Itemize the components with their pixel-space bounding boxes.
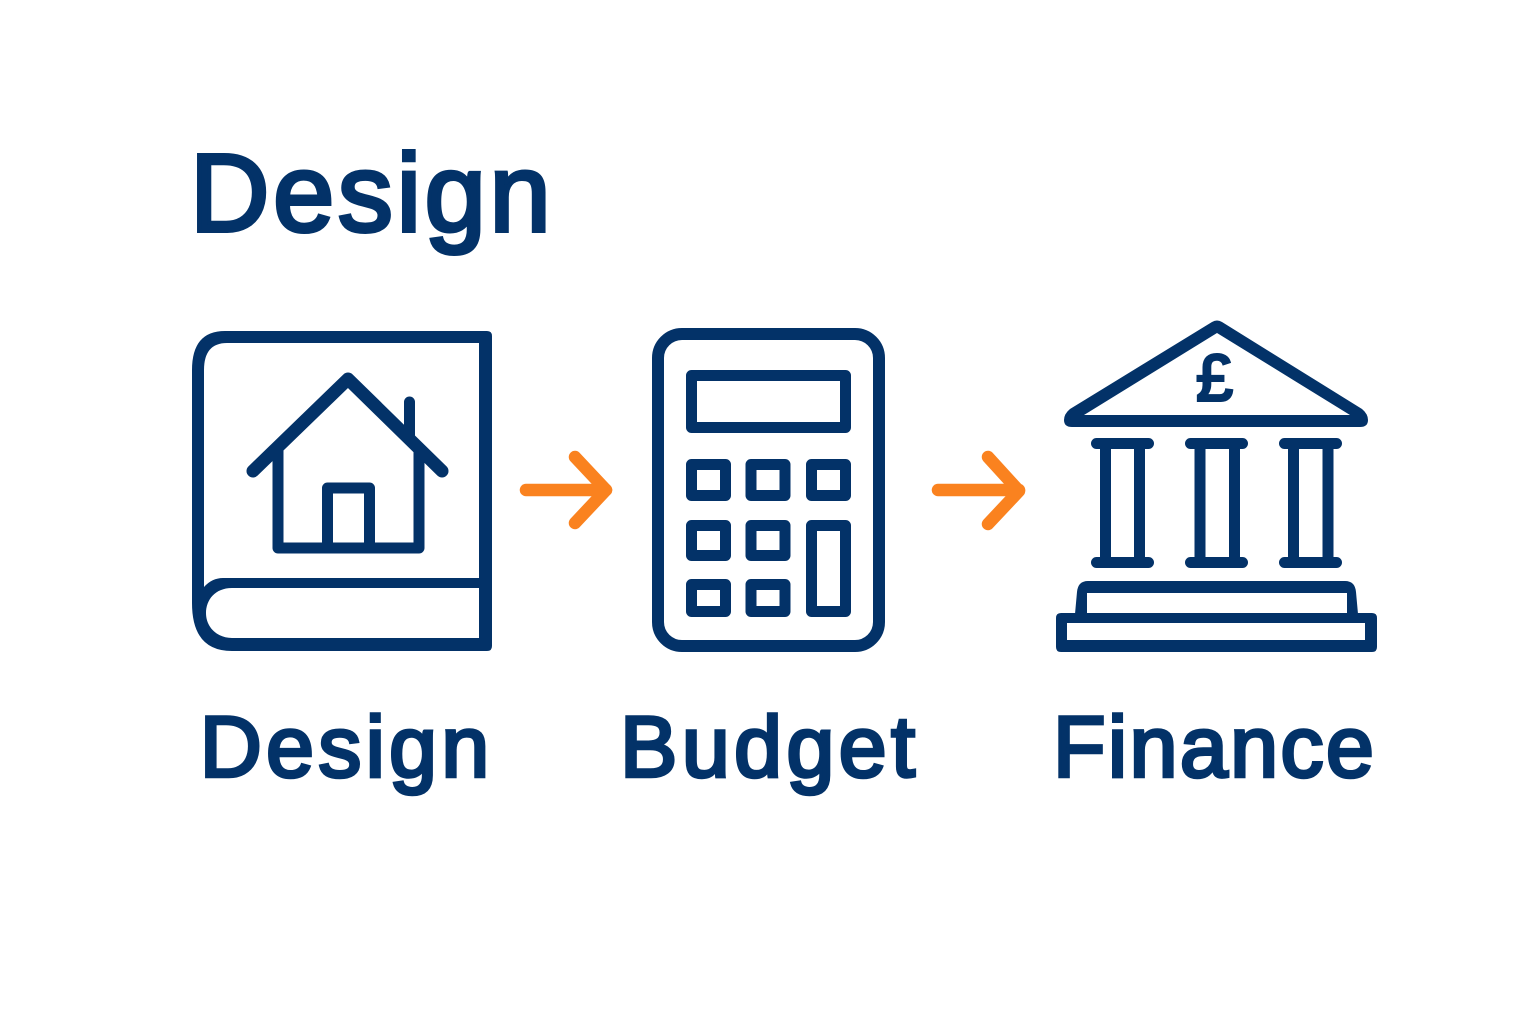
icon: design book with house [192, 331, 492, 651]
icon: budget calculator [658, 334, 879, 646]
label: budget: Budget [620, 699, 915, 795]
icon: finance bank with pound sign [1056, 320, 1377, 652]
arrow: design to budget [526, 457, 606, 523]
arrow: budget to finance [938, 457, 1019, 524]
label: finance: Finance [1053, 699, 1374, 795]
title: Design [190, 132, 551, 255]
icon: finance bank with pound sign: £ [1196, 340, 1233, 414]
label: design: Design [200, 699, 489, 795]
